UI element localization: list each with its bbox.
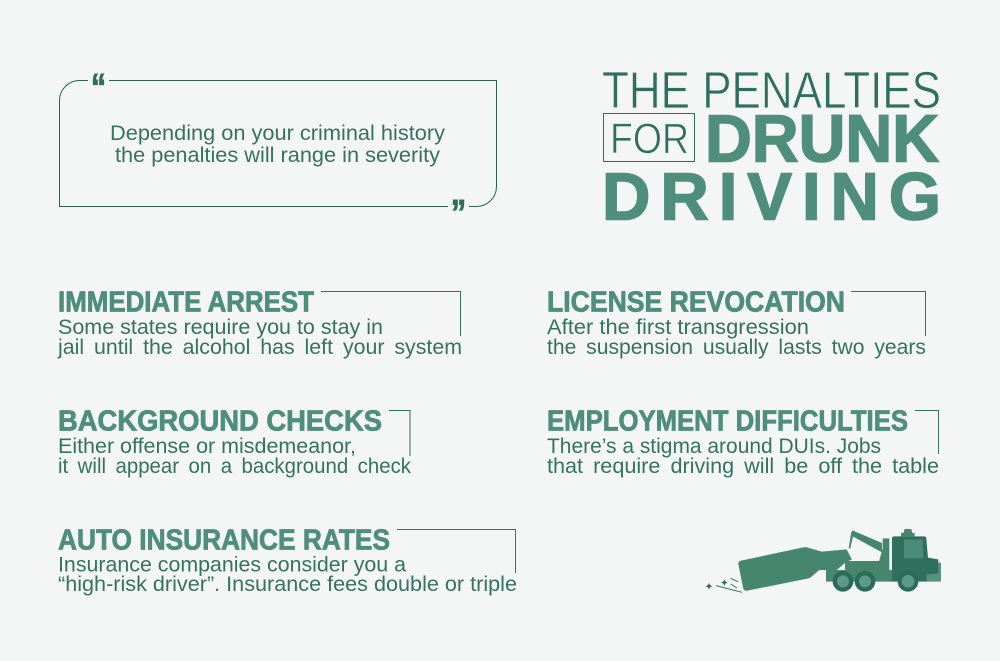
wheels bbox=[833, 571, 918, 592]
penalty: background checks: BACKGROUND CHECKS bbox=[58, 406, 382, 438]
icon: tow truck hauling a bottle bbox=[706, 529, 941, 592]
title: THE PENALTIES bbox=[602, 62, 941, 120]
penalty: auto insurance rates bbox=[58, 524, 517, 596]
penalty: immediate arrest: Some states require you to stay in bbox=[58, 315, 383, 339]
penalty: background checks: Either offense or misdemeanor, bbox=[58, 434, 356, 458]
bumper bbox=[926, 563, 941, 582]
quote text: Depending on your criminal history bbox=[110, 121, 445, 145]
penalty: auto insurance rates: Insurance companies consider you a bbox=[58, 552, 406, 576]
quote text: the penalties will range in severity bbox=[115, 143, 440, 167]
roof light bbox=[901, 529, 915, 536]
title: boxed FOR: FOR bbox=[610, 115, 689, 163]
penalty: license revocation: LICENSE REVOCATION bbox=[547, 286, 845, 318]
title bbox=[602, 62, 941, 234]
penalty: license revocation: After the first transgression bbox=[547, 315, 809, 339]
penalty: immediate arrest: IMMEDIATE ARREST bbox=[58, 286, 315, 318]
penalty: employment difficulties: EMPLOYMENT DIFFICULTIES bbox=[547, 406, 908, 438]
speed lines and sparks bbox=[706, 578, 742, 592]
cab bbox=[892, 536, 938, 582]
closing quotation mark: ” bbox=[451, 192, 466, 233]
penalty: immediate arrest: jail until the alcohol has left your system bbox=[57, 335, 462, 359]
penalty: employment difficulties bbox=[547, 406, 939, 478]
penalty: auto insurance rates: “high-risk driver”. Insurance fees double or triple bbox=[58, 572, 517, 596]
quote text bbox=[110, 121, 445, 167]
bottle bbox=[738, 547, 852, 591]
penalty: background checks bbox=[58, 406, 411, 478]
truck bed bbox=[826, 561, 892, 582]
title: DRIVING bbox=[602, 160, 941, 234]
opening quotation mark: “ bbox=[91, 66, 106, 107]
title: DRUNK bbox=[705, 102, 939, 176]
cab window bbox=[904, 539, 923, 558]
penalty: auto insurance rates: AUTO INSURANCE RATES bbox=[58, 524, 390, 556]
penalty: immediate arrest bbox=[57, 286, 462, 359]
penalty: employment difficulties: that require driving will be off the table bbox=[547, 454, 939, 478]
tow crane arm bbox=[849, 530, 889, 562]
penalty: license revocation bbox=[547, 286, 926, 359]
penalty: employment difficulties: There’s a stigma around DUIs. Jobs bbox=[547, 434, 881, 458]
penalty: background checks: it will appear on a background check bbox=[58, 454, 411, 478]
quote panel bbox=[60, 66, 496, 233]
penalty: license revocation: the suspension usually lasts two years bbox=[547, 335, 926, 359]
